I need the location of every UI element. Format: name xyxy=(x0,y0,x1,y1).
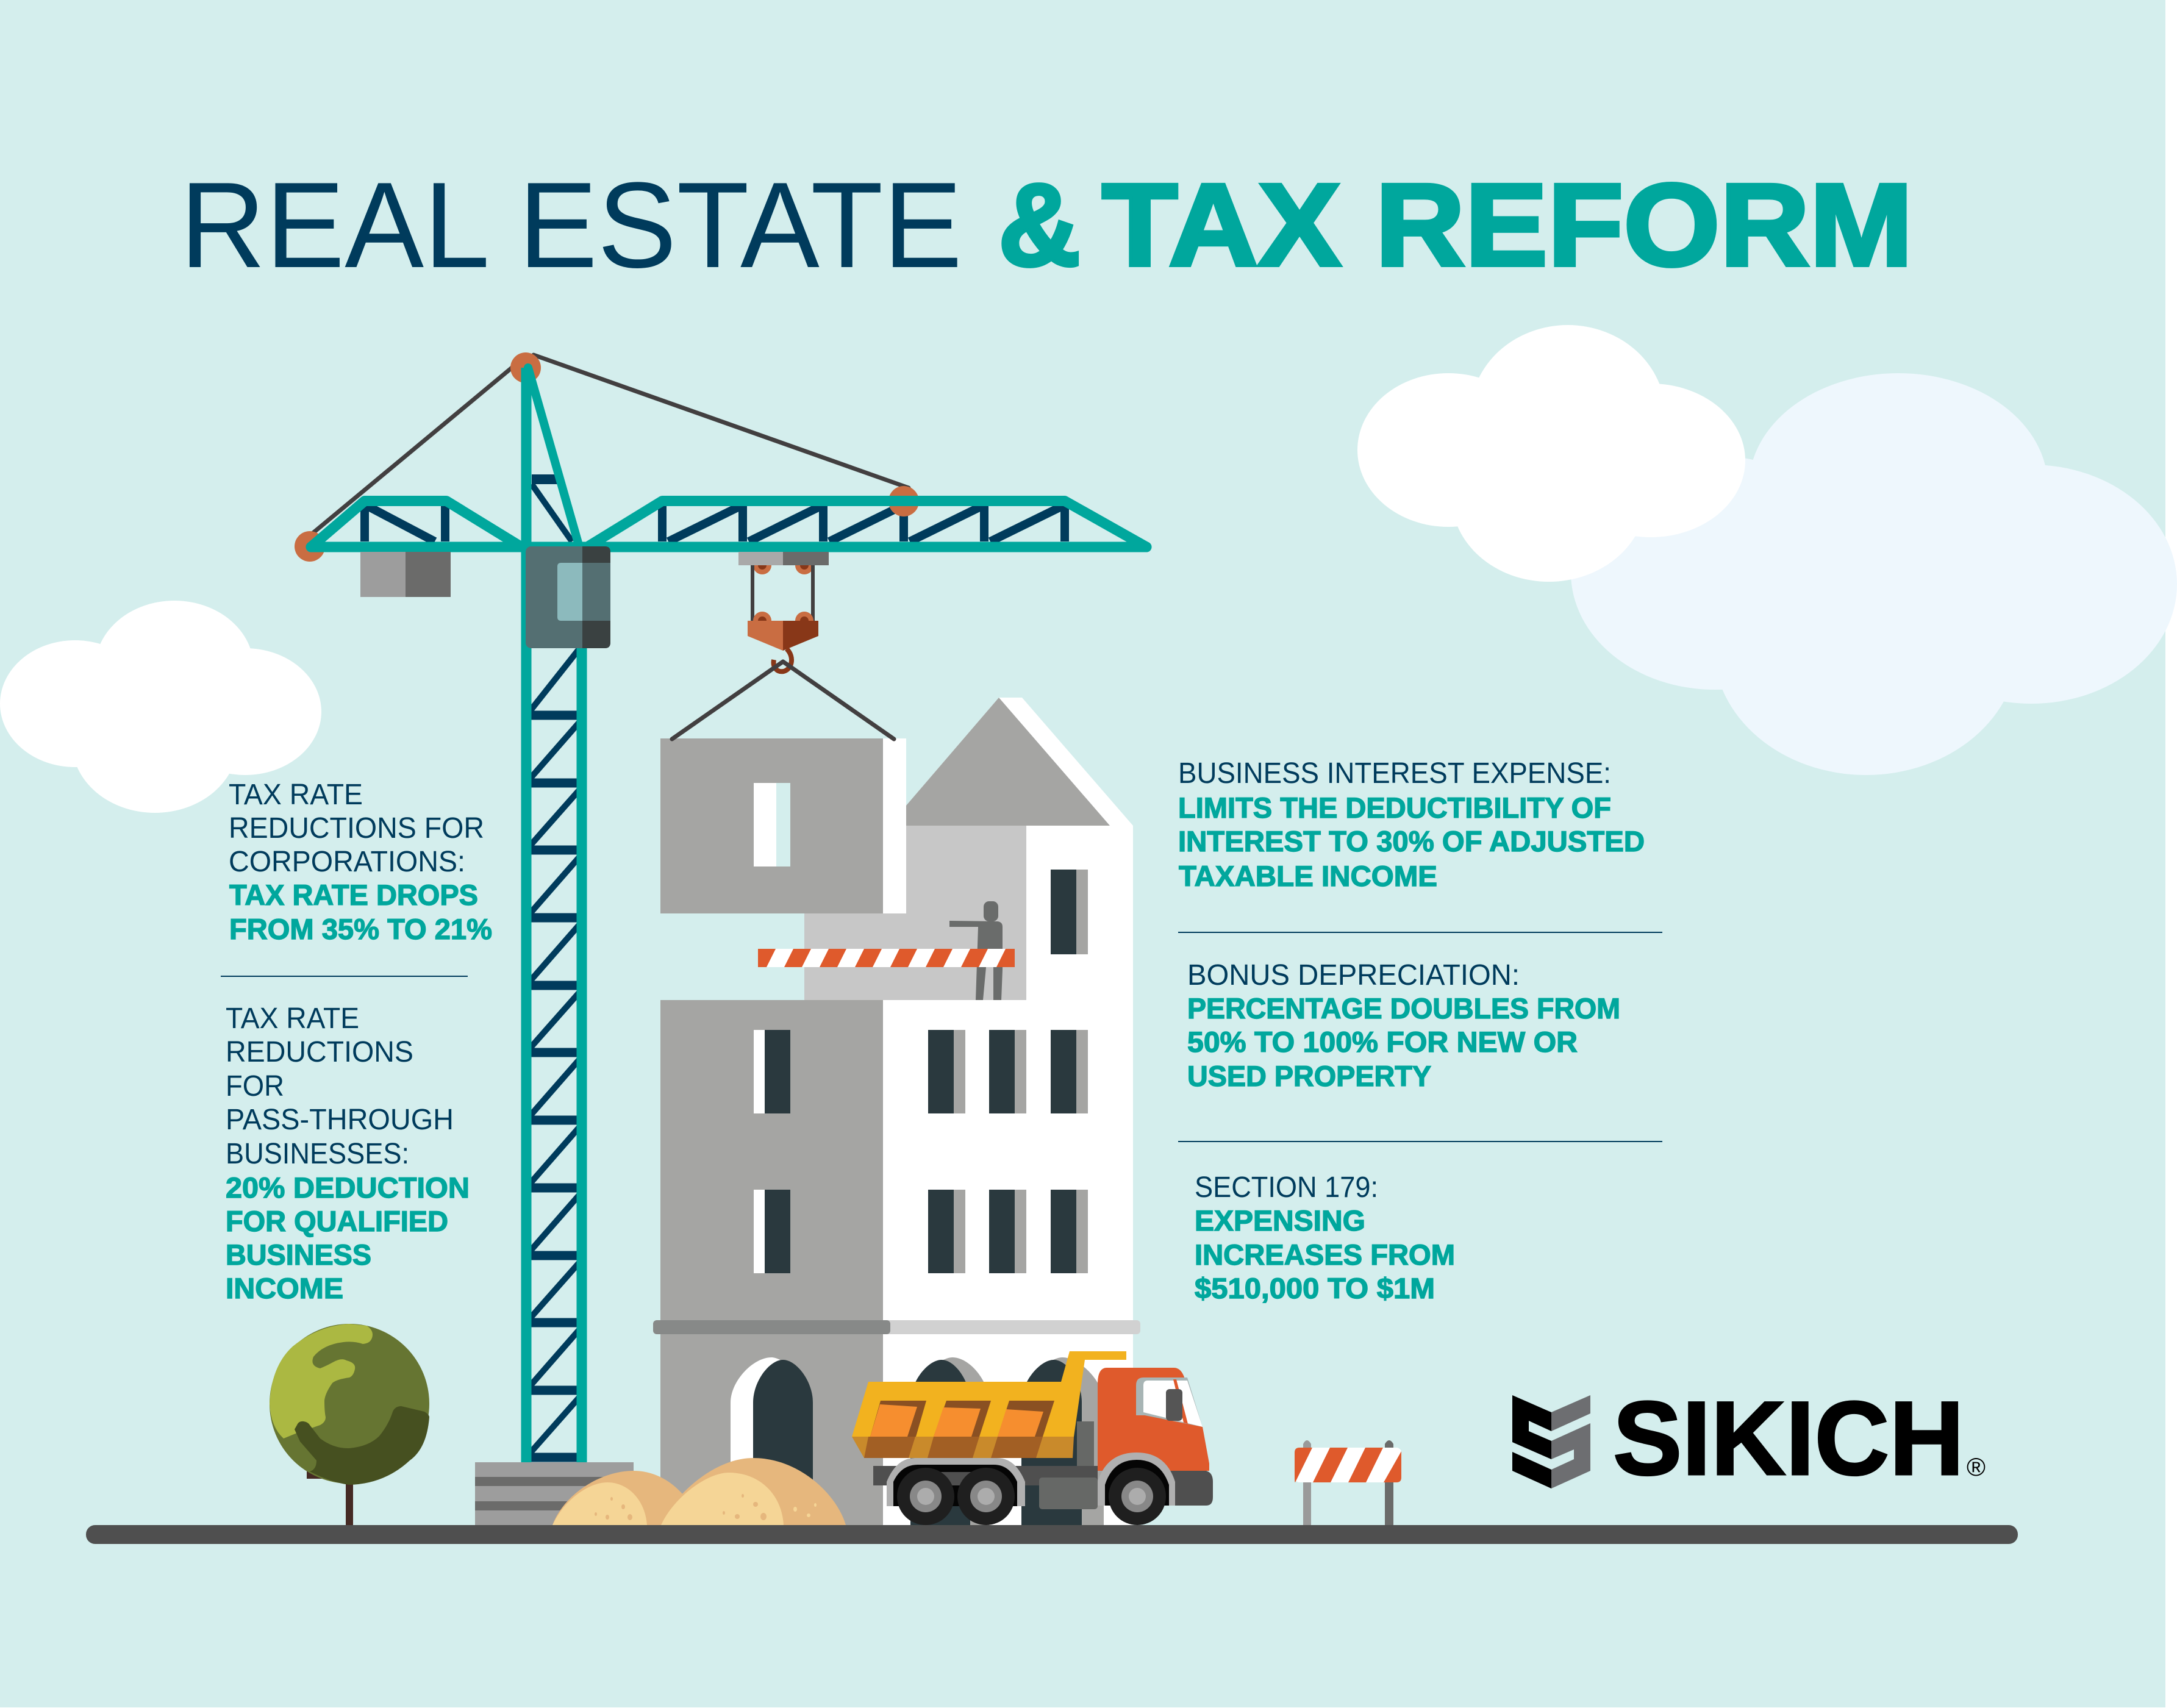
building xyxy=(653,698,1140,1525)
text block: section 179: SECTION 179: xyxy=(1195,1171,1378,1204)
text block: business interest expense: BUSINESS INTEREST EXPENSE: xyxy=(1178,757,1611,790)
crane mast and jib xyxy=(311,368,1146,1462)
text block: section 179 xyxy=(1195,1171,1455,1304)
logo: Sikich xyxy=(1512,1380,1986,1497)
crane cab xyxy=(526,546,610,648)
hanging wall block xyxy=(660,738,906,913)
truck chassis xyxy=(873,1421,1213,1509)
text block: pass-through: FOR QUALIFIED xyxy=(226,1205,448,1237)
dump truck xyxy=(852,1351,1213,1525)
text block: corporations: REDUCTIONS FOR xyxy=(229,812,484,845)
crane pulleys xyxy=(295,352,919,562)
text block: business interest expense: TAXABLE INCOME xyxy=(1179,860,1437,892)
crane jib truss xyxy=(365,479,1065,541)
text block: corporations xyxy=(229,779,492,945)
sand piles xyxy=(552,1458,846,1525)
text block: business interest expense: INTEREST TO 30% OF ADJUSTED xyxy=(1178,825,1645,857)
divider line right 2 xyxy=(1178,1141,1662,1142)
crane ladder rungs xyxy=(529,646,581,1457)
text block: corporations: TAX RATE DROPS xyxy=(229,879,478,911)
text block: pass-through: TAX RATE xyxy=(226,1002,359,1035)
truck fenders xyxy=(887,1453,1175,1506)
text block: bonus depreciation: USED PROPERTY xyxy=(1187,1060,1431,1092)
title xyxy=(180,157,1913,293)
title: REAL ESTATE xyxy=(180,157,962,293)
text block: business interest expense xyxy=(1178,757,1645,892)
divider line right 1 xyxy=(1178,932,1662,933)
worker figure xyxy=(949,901,1003,1000)
text block: bonus depreciation: BONUS DEPRECIATION: xyxy=(1187,959,1520,992)
text block: bonus depreciation xyxy=(1187,959,1620,1092)
text block: pass-through: BUSINESS xyxy=(226,1238,371,1271)
crane counterweight xyxy=(360,552,451,597)
text block: corporations: FROM 35% TO 21% xyxy=(229,913,492,945)
truck dump bed xyxy=(852,1351,1126,1458)
text block: pass-through: REDUCTIONS xyxy=(226,1036,413,1068)
divider line left xyxy=(221,976,468,977)
logo mark xyxy=(1512,1395,1590,1488)
crane base xyxy=(475,1462,634,1525)
text block: pass-through: FOR xyxy=(226,1070,284,1102)
text block: business interest expense: LIMITS THE DEDUCTIBILITY OF xyxy=(1178,791,1611,824)
text block: bonus depreciation: PERCENTAGE DOUBLES FROM xyxy=(1187,992,1620,1024)
text block: section 179: EXPENSING xyxy=(1195,1204,1365,1237)
road xyxy=(86,1525,2018,1544)
logo registered mark: ® xyxy=(1967,1453,1986,1481)
building ledge xyxy=(653,1320,1140,1334)
tree xyxy=(270,1324,429,1526)
title: & xyxy=(998,159,1081,290)
building windows xyxy=(754,870,1088,1273)
text block: pass-through: BUSINESSES: xyxy=(226,1138,409,1170)
text block: corporations: TAX RATE xyxy=(229,779,363,811)
crane cables xyxy=(305,355,909,540)
text block: bonus depreciation: 50% TO 100% FOR NEW OR xyxy=(1187,1026,1578,1058)
cloud: pale blue xyxy=(1571,373,2177,775)
text block: section 179: $510,000 TO $1M xyxy=(1195,1272,1435,1304)
cloud: white upper right xyxy=(1357,325,1745,582)
truck wheels xyxy=(897,1468,1166,1525)
safety barrier on floor xyxy=(758,949,1015,967)
crane xyxy=(295,352,1146,1525)
building arches xyxy=(731,1357,1104,1525)
title: TAX REFORM xyxy=(1102,159,1913,290)
text block: section 179: INCREASES FROM xyxy=(1195,1238,1455,1271)
crane hook assembly xyxy=(672,552,894,739)
road barricade xyxy=(1295,1440,1401,1525)
text block: pass-through xyxy=(226,1002,470,1304)
truck cab xyxy=(1098,1368,1209,1471)
cloud: white left xyxy=(0,601,321,813)
text block: corporations: CORPORATIONS: xyxy=(229,846,465,878)
text block: pass-through: 20% DEDUCTION xyxy=(226,1171,470,1204)
logo wordmark: SIKICH xyxy=(1613,1380,1964,1497)
text block: pass-through: INCOME xyxy=(226,1272,343,1304)
text block: pass-through: PASS-THROUGH xyxy=(226,1104,454,1136)
